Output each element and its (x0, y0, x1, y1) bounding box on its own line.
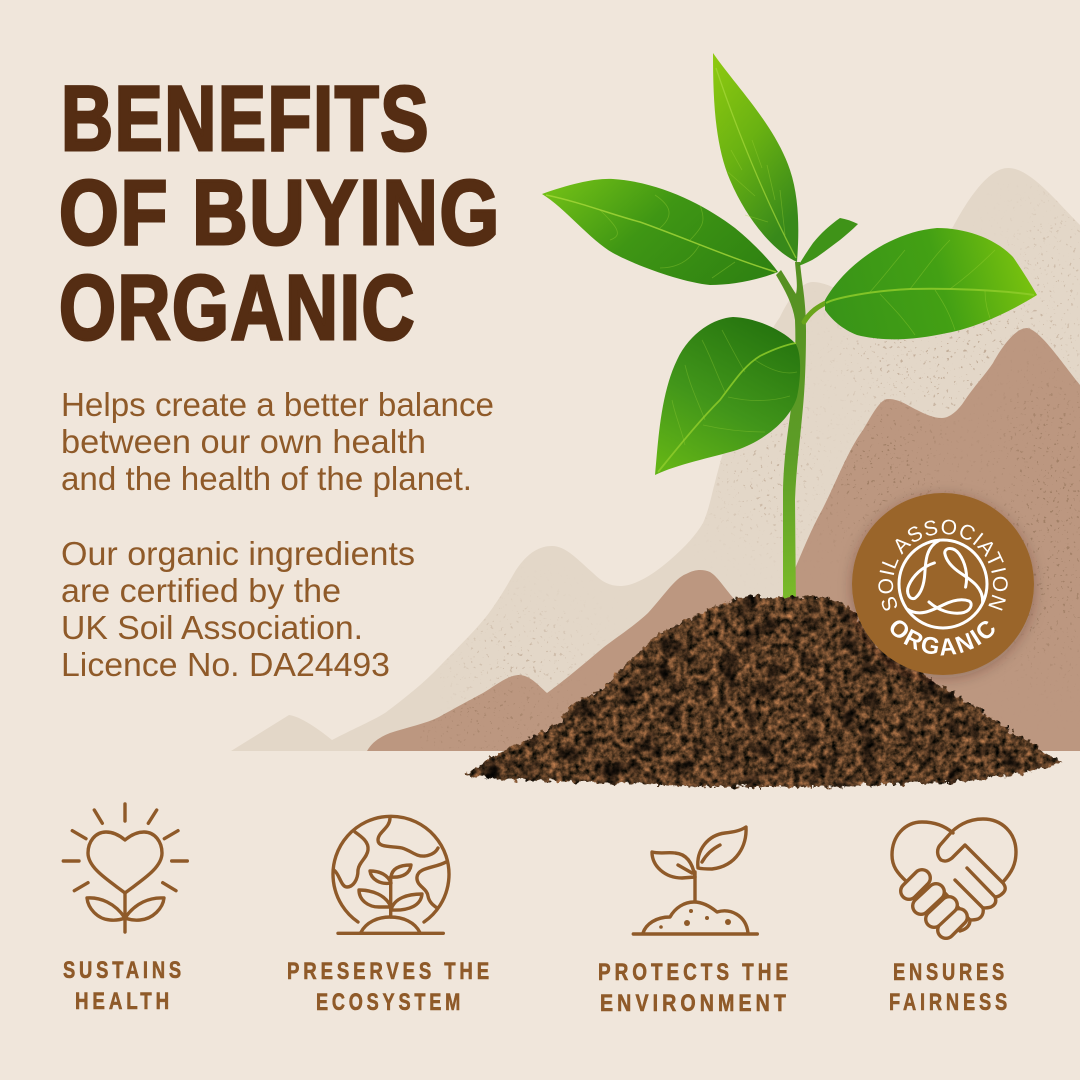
label: sustains health: HEALTH (75, 988, 173, 1015)
text block: certification statement (61, 535, 415, 683)
text block: certification statement: are certified by the (61, 572, 341, 609)
leaf: small bud (798, 218, 858, 266)
mountains: light back range (220, 160, 1080, 760)
title: OF BUYING (59, 162, 501, 264)
label: sustains health (63, 957, 185, 1015)
text block: certification statement: Our organic ingredients (61, 535, 415, 572)
leaf: top (713, 53, 798, 262)
text block: certification statement: Licence No. DA24493 (61, 646, 390, 683)
label: preserves the ecosystem (287, 958, 493, 1016)
title: ORGANIC (59, 257, 416, 359)
text block: balance statement: between our own health (61, 423, 426, 460)
icon: heart flower with sun rays (63, 804, 187, 932)
label: protects the environment (598, 959, 792, 1017)
icon: globe with seedling (333, 816, 449, 933)
label: protects the environment: ENVIRONMENT (600, 990, 790, 1017)
badge ring and triple-loop emblem (899, 538, 987, 628)
icon: handshake heart (892, 819, 1016, 931)
icon: sprout in soil (633, 827, 757, 934)
label: preserves the ecosystem: ECOSYSTEM (316, 989, 464, 1016)
leaf: lower (655, 317, 800, 475)
leaf: right (825, 228, 1037, 339)
badge text: Soil Association: SOIL ASSOCIATION (878, 520, 1008, 611)
leaf: left (542, 179, 778, 285)
label: ensures fairness: FAIRNESS (889, 989, 1011, 1016)
label: protects the environment: PROTECTS THE (598, 959, 792, 986)
label: ensures fairness: ENSURES (893, 959, 1008, 986)
label: sustains health: SUSTAINS (63, 957, 185, 984)
text block: balance statement (61, 386, 494, 497)
text block: balance statement: Helps create a better balance (61, 386, 494, 423)
soil pile (464, 597, 1063, 787)
title (59, 68, 501, 359)
text block: balance statement: and the health of the planet. (61, 460, 472, 497)
label: ensures fairness (889, 959, 1011, 1016)
title: BENEFITS (61, 68, 430, 170)
seedling plant (542, 53, 1037, 610)
label: preserves the ecosystem: PRESERVES THE (287, 958, 493, 985)
badge: Soil Association Organic (846, 490, 1040, 684)
stem (776, 262, 806, 610)
badge text: Organic: ORGANIC (890, 620, 994, 656)
petiole: right leaf (804, 301, 830, 322)
text block: certification statement: UK Soil Association. (61, 609, 363, 646)
mountains: dark front range (360, 320, 1080, 760)
